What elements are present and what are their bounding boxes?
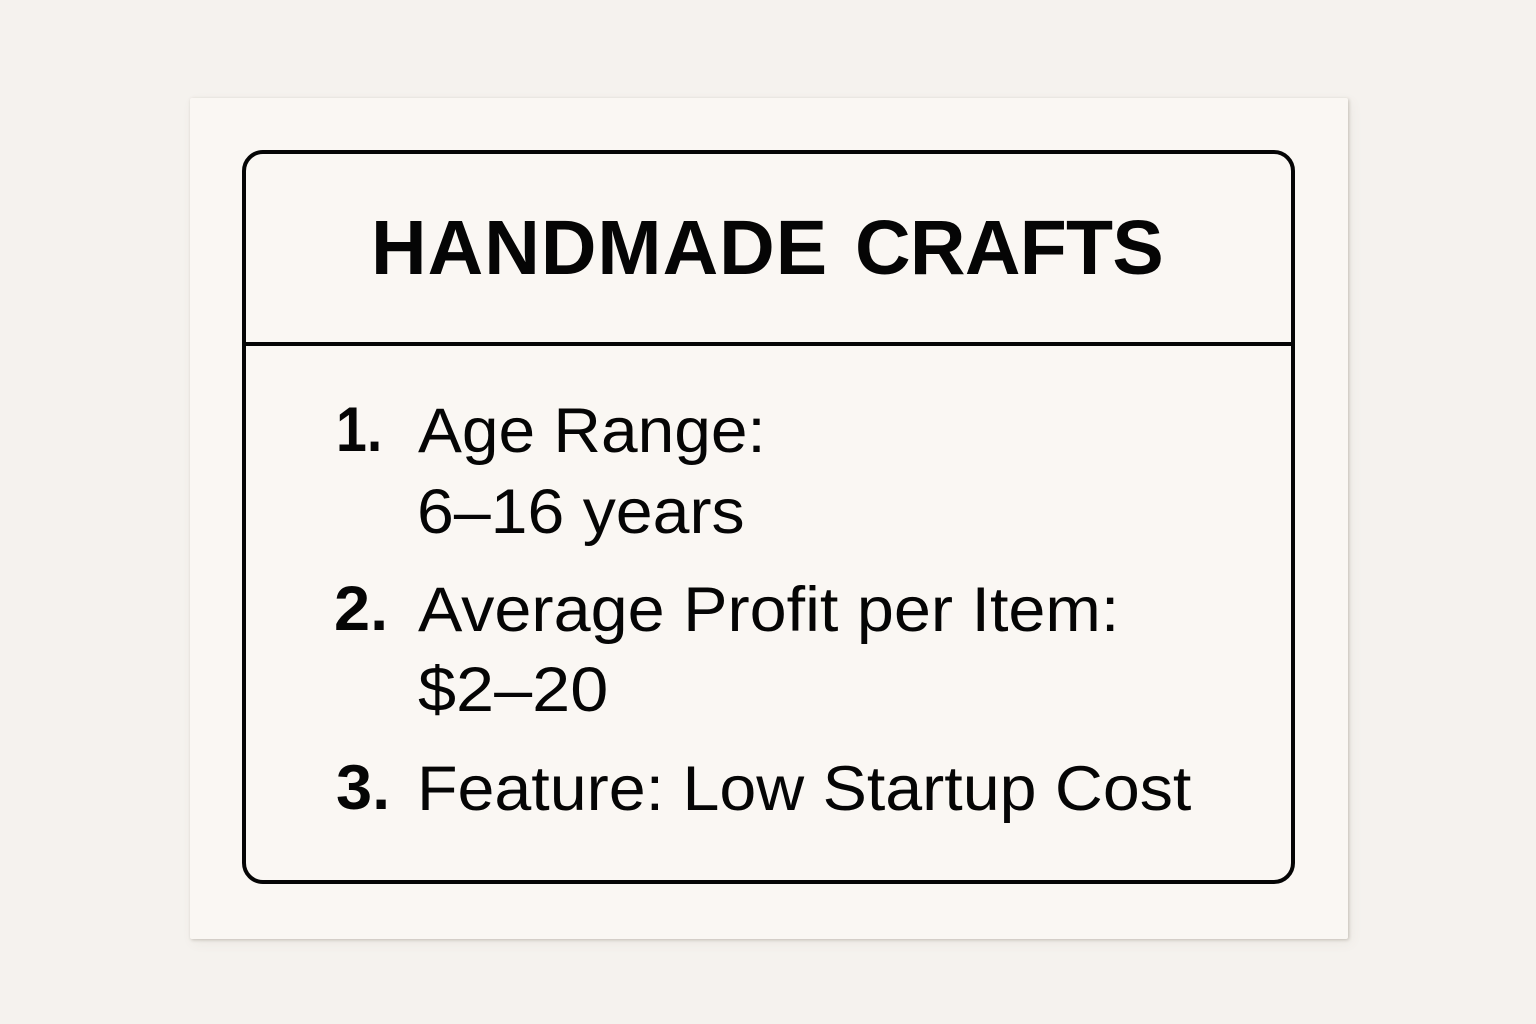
- item 3 text: Feature: Low Startup Cost: [417, 754, 1191, 824]
- title: CRAFTS: [855, 205, 1163, 291]
- item 2 value: $2–20: [418, 655, 608, 725]
- item 2 label: Average Profit per Item:: [418, 575, 1119, 645]
- list number 1: 1.: [336, 395, 382, 465]
- list number 3: 3.: [336, 753, 390, 823]
- item 1 label: Age Range:: [418, 396, 766, 466]
- title: [371, 205, 1163, 291]
- frame border: [242, 150, 1295, 884]
- card panel: [190, 98, 1348, 939]
- item 1 value: 6–16 years: [417, 477, 745, 547]
- list number 2: 2.: [334, 574, 388, 644]
- title: HANDMADE: [371, 205, 828, 291]
